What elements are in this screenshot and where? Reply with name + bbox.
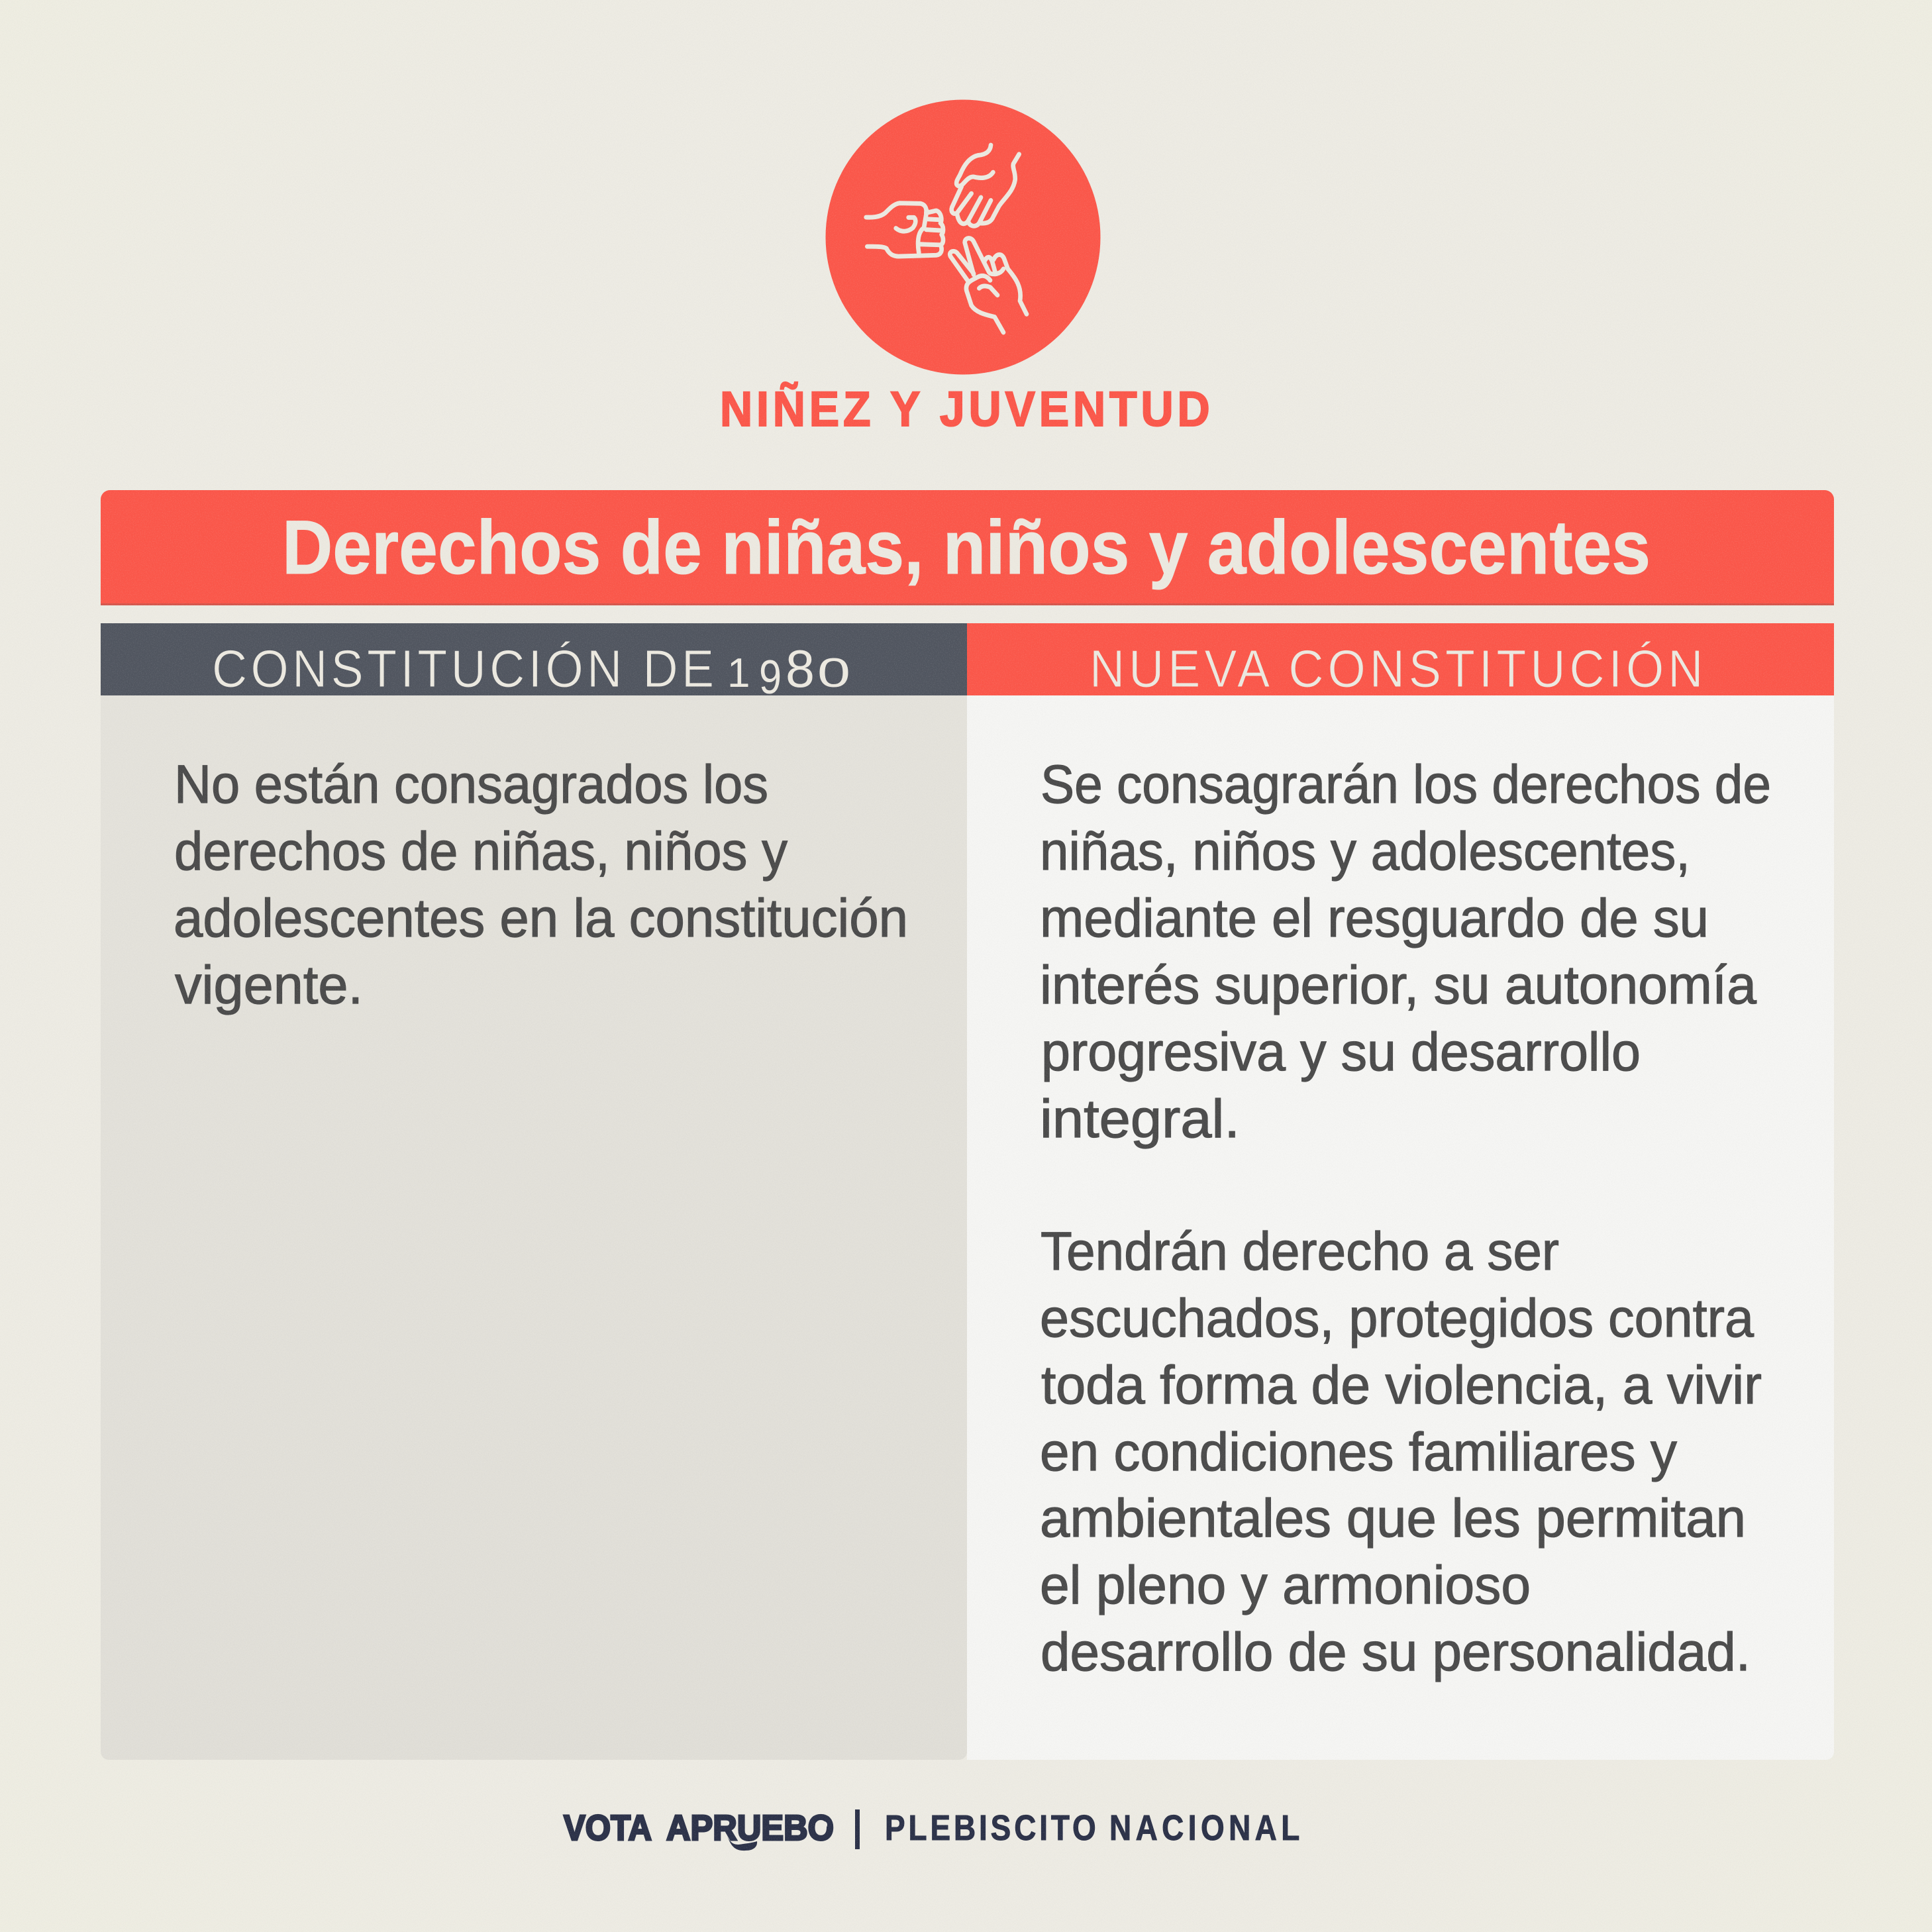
body text: right column paragraph 1 [1040, 754, 1771, 1149]
body text: right column paragraph 1: Se consagrarán los derechos de [1041, 754, 1771, 815]
column header: Constitución de 1980: CONSTITUCIÓN DE [212, 639, 714, 699]
column header: Nueva Constitución [967, 623, 1834, 699]
logo: Vota Apruebo [564, 1808, 834, 1851]
title bar [101, 490, 1834, 605]
body text: right column paragraph 2: ambientales que les permitan [1040, 1488, 1746, 1549]
text: Plebiscito Nacional [885, 1808, 1299, 1848]
text: Plebiscito Nacional: PLEBISCITO [885, 1808, 1096, 1848]
body text: right column paragraph 2: toda forma de violencia, a vivir [1041, 1355, 1762, 1415]
text: Plebiscito Nacional: NACIONAL [1109, 1808, 1299, 1848]
logo: Vota Apruebo: VOTA [564, 1808, 652, 1848]
column header: Constitución de 1980: 9 [759, 651, 782, 704]
column header: Constitución de 1980 [101, 623, 967, 704]
body text: right column paragraph 2: escuchados, protegidos contra [1040, 1288, 1754, 1348]
heading: theme name: NIÑEZ Y JUVENTUD [720, 382, 1210, 437]
body text: right column paragraph 1: mediante el resguardo de su [1040, 888, 1709, 948]
panel: Nueva Constitución [967, 623, 1834, 1760]
panel: Constitución de 1980 [101, 623, 967, 1760]
column header: Constitución de 1980: 8 [786, 639, 815, 698]
icon: open hand (paper) [952, 145, 1019, 226]
body text: right column paragraph 1: niñas, niños y adolescentes, [1040, 821, 1690, 882]
body text: right column paragraph 2 [1040, 1221, 1762, 1682]
body text: left column [174, 754, 908, 1015]
body text: left column: adolescentes en la constitución [174, 888, 908, 948]
body text: left column: vigente. [175, 955, 363, 1015]
body text: right column paragraph 2: el pleno y armonioso [1040, 1555, 1531, 1615]
icon: peace hand (scissors) [950, 238, 1027, 332]
body text: left column: No están consagrados los [174, 754, 768, 815]
divider [855, 1809, 860, 1849]
heading: main title: Derechos de niñas, niños y adolescentes [282, 505, 1651, 590]
column header: Constitución de 1980: 1 [727, 650, 750, 696]
body text: left column: derechos de niñas, niños y [174, 821, 788, 882]
footer: Vota Apruebo, Plebiscito Nacional [564, 1808, 1299, 1851]
icon: fist (rock) [866, 203, 943, 256]
body text: right column paragraph 1: interés superior, su autonomía [1040, 955, 1756, 1015]
column header: Nueva Constitución: NUEVA CONSTITUCIÓN [1090, 639, 1703, 699]
icon: red circle with rock paper scissors hands [825, 99, 1101, 375]
body text: right column paragraph 1: integral. [1040, 1089, 1240, 1149]
body text: right column paragraph 1: progresiva y su desarrollo [1041, 1022, 1641, 1082]
column header: Constitución de 1980: 0 [817, 650, 850, 696]
body text: right column paragraph 2: Tendrán derecho a ser [1041, 1221, 1559, 1282]
body text: right column paragraph 2: desarrollo de su personalidad. [1041, 1622, 1751, 1682]
logo: Vota Apruebo: APRUEBO [666, 1808, 834, 1848]
body text: right column paragraph 2: en condiciones familiares y [1040, 1422, 1677, 1482]
